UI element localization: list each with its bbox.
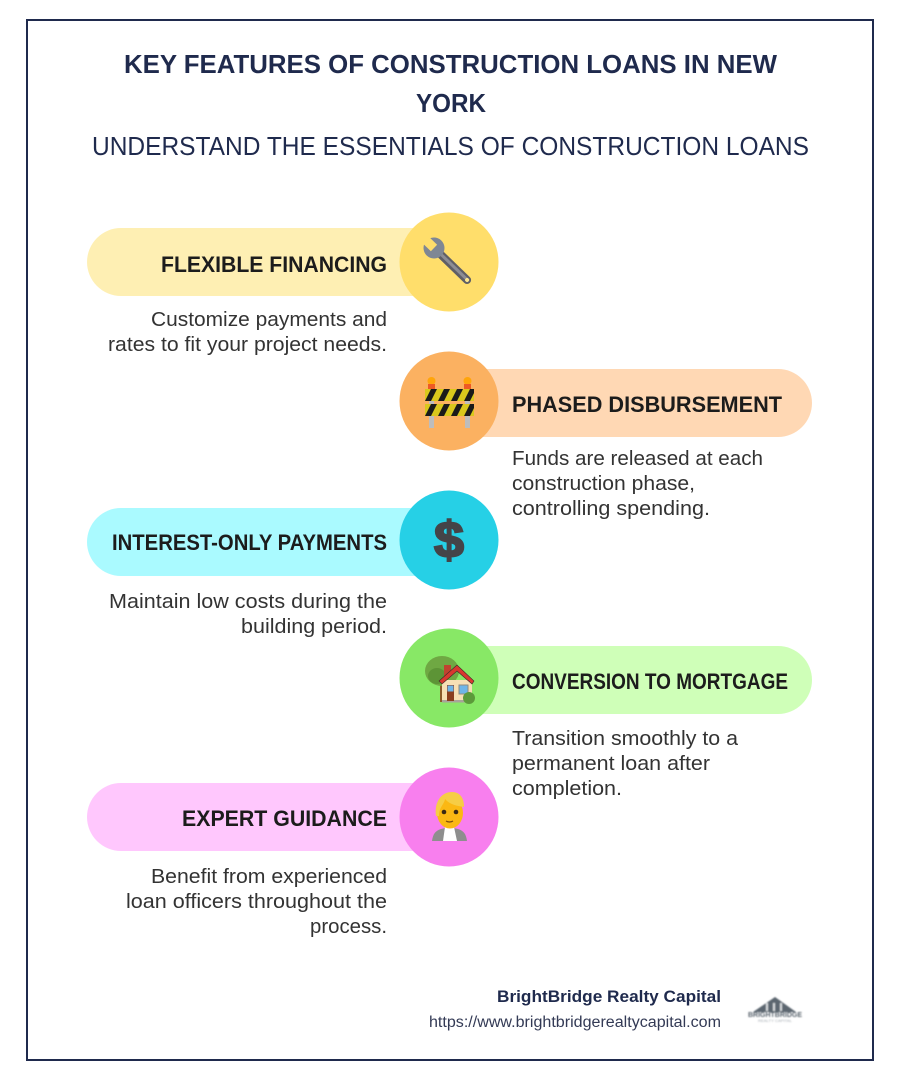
panel: expert guidance	[87, 768, 498, 938]
heading pill: flexible financing: FLEXIBLE FINANCING	[161, 252, 387, 277]
heading pill: expert guidance: EXPERT GUIDANCE	[182, 806, 387, 831]
heading pill: expert guidance	[87, 783, 449, 851]
description: phased disbursement	[512, 448, 763, 520]
icon: wrench	[400, 212, 498, 312]
description: expert guidance	[126, 866, 387, 938]
heading pill: conversion to mortgage: CONVERSION TO MORTGAGE	[512, 669, 788, 694]
description: phased disbursement: Funds are released at each	[512, 448, 763, 470]
description: expert guidance: process.	[310, 916, 387, 938]
description: expert guidance: loan officers throughout the	[126, 891, 387, 913]
description: flexible financing	[108, 309, 387, 356]
icon: dollar sign	[400, 490, 498, 590]
icon: dollar sign: $	[434, 511, 464, 568]
footer: website url: https://www.brightbridgerealtycapital.com	[429, 1014, 721, 1031]
description: interest-only payments	[109, 591, 387, 638]
footer: company name: BrightBridge Realty Capital	[497, 987, 721, 1006]
panel: phased disbursement	[400, 352, 812, 520]
title	[124, 49, 777, 118]
title: KEY FEATURES OF CONSTRUCTION LOANS IN NEW	[124, 49, 777, 79]
heading pill: interest-only payments: INTEREST-ONLY PAYMENTS	[112, 530, 387, 555]
icon: company logo	[748, 997, 802, 1023]
subtitle: UNDERSTAND THE ESSENTIALS OF CONSTRUCTION LOANS	[92, 131, 809, 161]
panel: conversion to mortgage	[400, 628, 812, 800]
icon: house with tree	[400, 628, 498, 728]
description: conversion to mortgage: completion.	[512, 778, 622, 800]
heading pill: flexible financing	[87, 228, 449, 296]
description: interest-only payments: building period.	[241, 616, 387, 638]
description: expert guidance: Benefit from experienced	[151, 866, 387, 888]
description: conversion to mortgage: permanent loan after	[512, 753, 710, 775]
heading pill: phased disbursement: PHASED DISBURSEMENT	[512, 392, 783, 417]
title: YORK	[416, 88, 486, 118]
heading pill: interest-only payments	[87, 508, 449, 576]
panel: flexible financing	[87, 212, 499, 356]
description: conversion to mortgage	[512, 728, 739, 800]
icon: construction barrier	[400, 352, 498, 450]
heading pill: phased disbursement	[449, 369, 812, 437]
description: conversion to mortgage: Transition smoothly to a	[512, 728, 739, 750]
heading pill: conversion to mortgage	[449, 646, 812, 714]
description: flexible financing: rates to fit your project needs.	[108, 334, 387, 356]
icon: office worker	[400, 768, 498, 866]
icon: company logo: BRIGHTBRIDGE	[748, 1012, 802, 1019]
icon: company logo: REALTY CAPITAL	[758, 1018, 793, 1023]
description: phased disbursement: controlling spending.	[512, 498, 710, 520]
description: flexible financing: Customize payments and	[151, 309, 387, 331]
panel: interest-only payments	[87, 490, 498, 638]
description: phased disbursement: construction phase,	[512, 473, 695, 495]
description: interest-only payments: Maintain low costs during the	[109, 591, 387, 613]
